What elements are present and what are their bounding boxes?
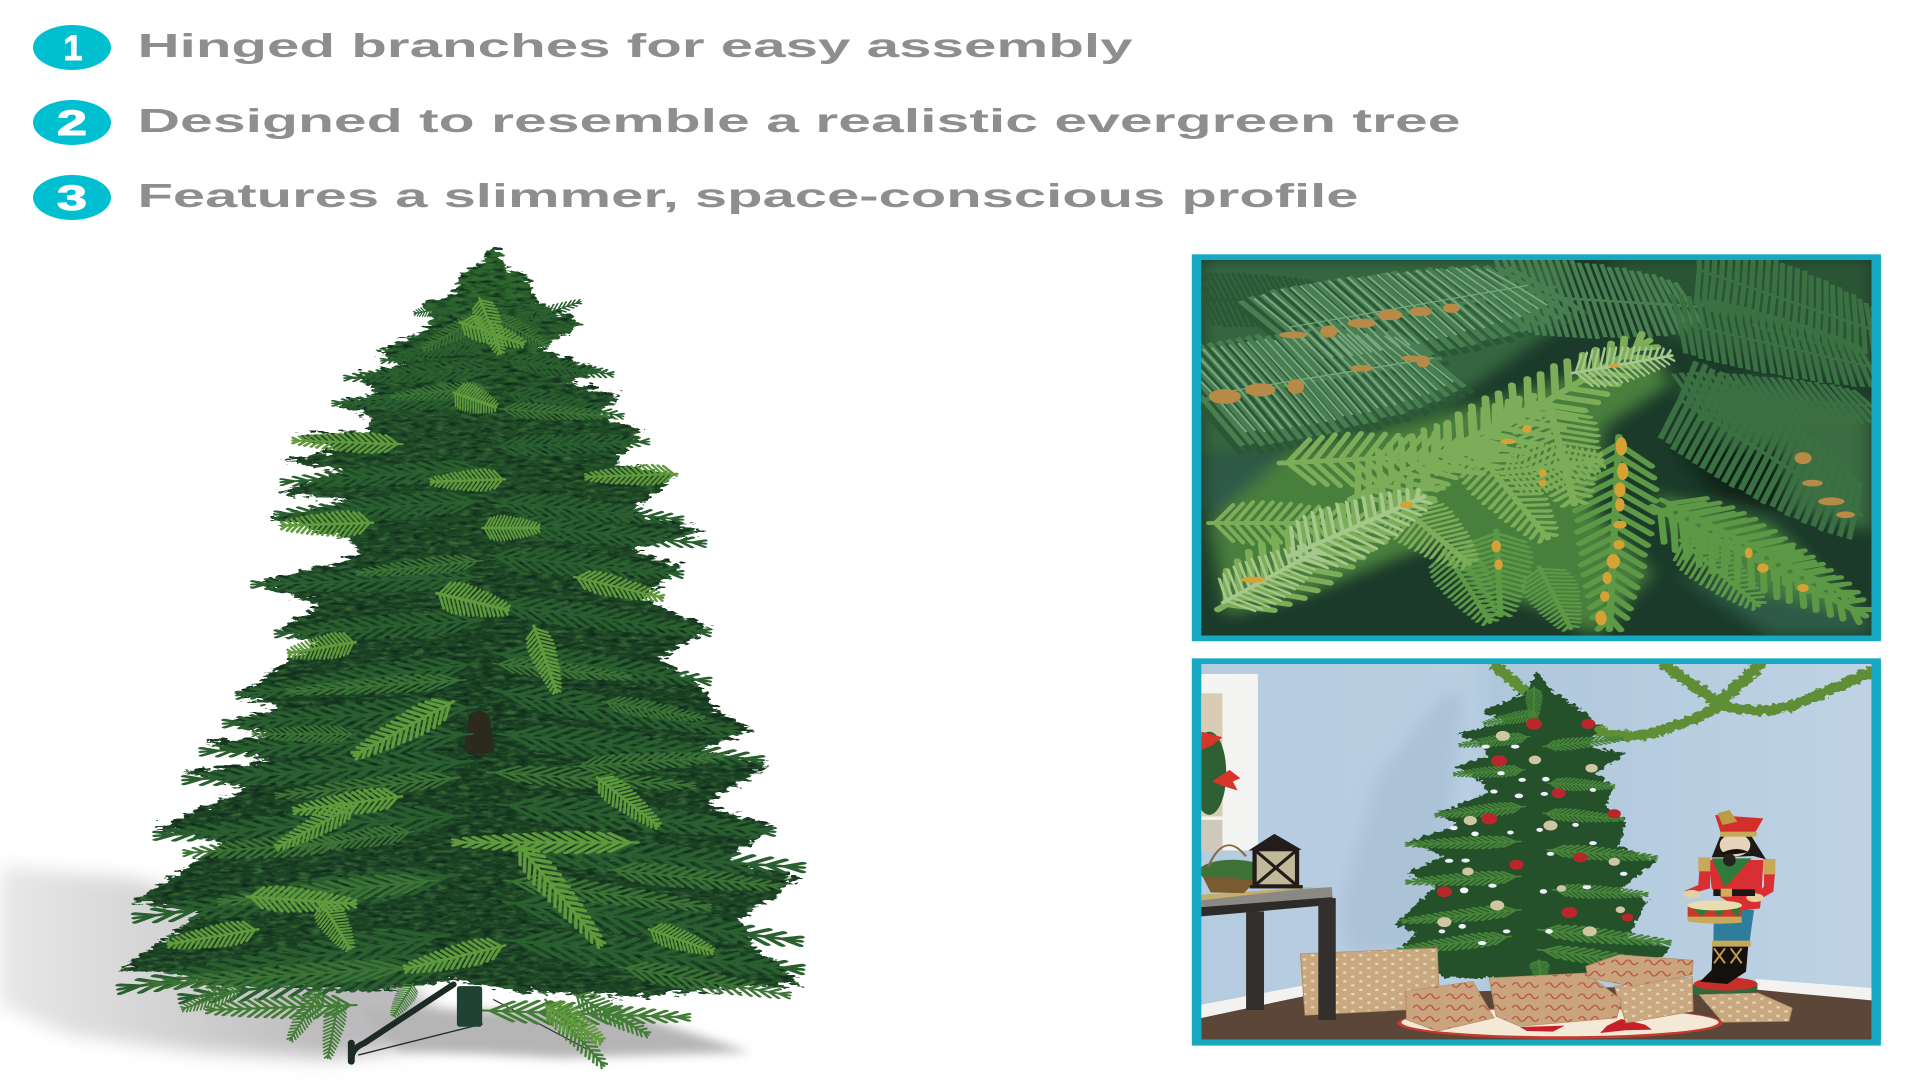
ground shadow bbox=[0, 866, 750, 1058]
tree skirt bbox=[1397, 1007, 1723, 1039]
hair bbox=[1712, 837, 1766, 859]
console table bbox=[1201, 886, 1336, 1020]
right upper branch bbox=[1658, 260, 1872, 540]
orange stem marks bbox=[1241, 364, 1809, 625]
bright green branches bbox=[1420, 435, 1889, 639]
lantern bbox=[1248, 834, 1303, 888]
panel 1 border bbox=[1192, 254, 1881, 641]
boots bbox=[1700, 945, 1748, 984]
feature 1: badge: 1 bbox=[64, 29, 82, 68]
feature 1: badge bbox=[33, 25, 111, 70]
poinsettia plant bbox=[1201, 732, 1240, 815]
light-green highlight branches bbox=[166, 294, 717, 1052]
feature 3: text: Features a slimmer, space-conscious profile bbox=[138, 177, 1358, 214]
window bbox=[1201, 674, 1258, 851]
dark thick branches bbox=[1201, 266, 1588, 455]
bottom sprigs bbox=[178, 979, 689, 1073]
feature 2: badge: 2 bbox=[57, 104, 87, 143]
drum bbox=[1688, 905, 1742, 919]
tree trunk bbox=[464, 711, 495, 754]
panel 2 border bbox=[1192, 658, 1881, 1046]
panel: close-up of needles bbox=[1192, 254, 1881, 642]
wrapped gifts bbox=[1300, 948, 1792, 1031]
feature 2: text: Designed to resemble a realistic evergreen tree bbox=[138, 102, 1460, 139]
basket bbox=[1201, 844, 1252, 894]
ornaments bbox=[1437, 718, 1633, 945]
coat bbox=[1708, 860, 1763, 911]
room photo bbox=[1192, 664, 1871, 1040]
mid-green branches bbox=[149, 309, 791, 1006]
base bbox=[1693, 984, 1757, 995]
floor and baseboards bbox=[1201, 979, 1871, 1040]
dark outer branches bbox=[117, 294, 804, 1014]
decorated tree bbox=[1395, 671, 1671, 978]
tree foliage mass bbox=[121, 246, 804, 997]
main tree illustration bbox=[117, 246, 804, 1073]
needle close-up photo bbox=[1201, 260, 1872, 636]
tan branch stems bbox=[1209, 304, 1855, 518]
feature 2: badge bbox=[33, 100, 111, 145]
feature 3: badge: 3 bbox=[57, 179, 87, 218]
tree shadow on wall bbox=[1346, 699, 1458, 946]
feature 3: badge bbox=[33, 175, 111, 220]
tree stand legs bbox=[351, 984, 585, 1061]
colour blocks bbox=[1201, 260, 1871, 636]
panel: room scene bbox=[1192, 658, 1881, 1046]
nutcracker figure bbox=[1683, 810, 1775, 995]
feature 1: text: Hinged branches for easy assembly bbox=[138, 27, 1134, 64]
feature list bbox=[33, 25, 1460, 220]
wall bbox=[1201, 664, 1871, 1040]
hat bbox=[1715, 815, 1764, 832]
legs bbox=[1713, 910, 1754, 943]
garland bbox=[1496, 666, 1871, 736]
tree stand tube bbox=[457, 986, 482, 1027]
face bbox=[1720, 836, 1750, 856]
